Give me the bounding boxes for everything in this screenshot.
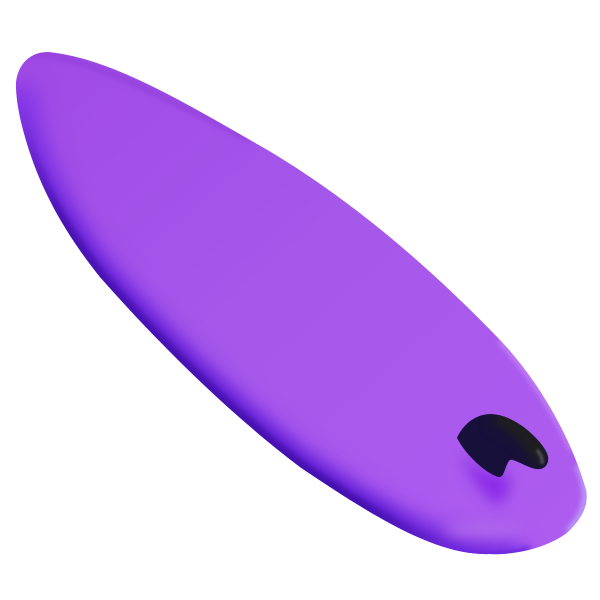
fin upper sheen [495,414,545,466]
upper rim tint [30,55,250,140]
tail underside rim [450,549,530,555]
board body [16,52,587,555]
right rim highlight [500,340,572,450]
fin rim light [541,444,548,456]
fin base shadow [462,452,509,505]
tail highlight [568,465,585,532]
tail bottom glow [443,524,527,536]
fin [457,414,549,477]
illustration: purple surfboard [16,52,587,554]
underside edge shadow [16,88,520,554]
